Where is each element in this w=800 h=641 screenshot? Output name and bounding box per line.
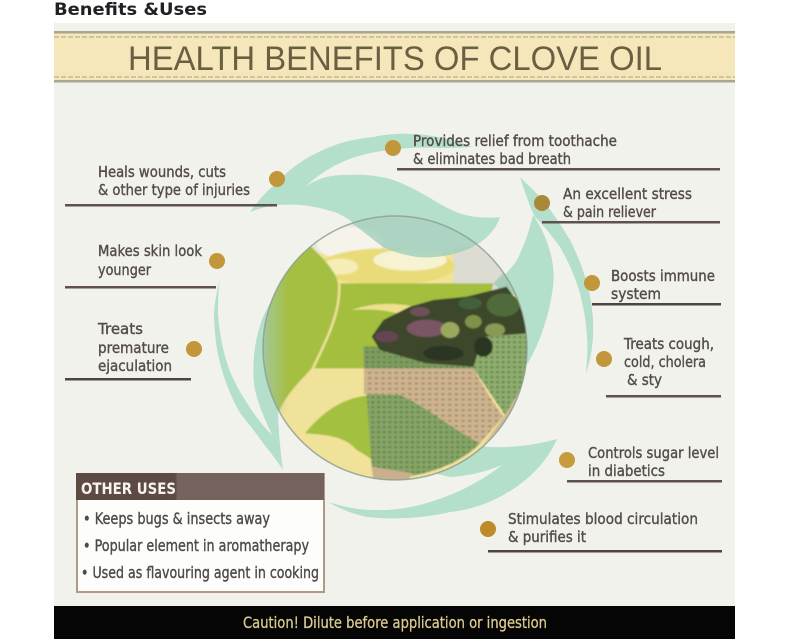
benefit: cough [596, 335, 721, 398]
benefit: cough: Treats cough, [623, 335, 714, 353]
benefit: sugar [559, 444, 722, 482]
benefit: sugar: Controls sugar level [588, 444, 719, 462]
caution text: Caution! Dilute before application or ingestion [243, 613, 547, 632]
benefit: wounds [65, 163, 285, 206]
jar upper background [311, 216, 479, 254]
cloves [372, 287, 527, 367]
sack lower green [367, 394, 480, 478]
other uses list: • Popular element in aromatherapy [83, 536, 309, 555]
benefit: immune [584, 267, 721, 306]
benefit: wounds: & other type of injuries [98, 181, 250, 199]
benefit: wounds: Heals wounds, cuts [98, 163, 226, 181]
benefit: sugar: in diabetics [588, 462, 665, 480]
benefit: toothache: Provides relief from toothache [413, 132, 617, 150]
yellow sliver [352, 303, 412, 314]
photo: clove oil jar and burlap sack in circle [263, 217, 527, 480]
sack right flap [473, 327, 530, 415]
benefit: toothache [385, 132, 720, 170]
leaf: left swirl [214, 280, 300, 470]
benefit: premature ejaculation: premature [98, 339, 169, 357]
benefit: skin [65, 242, 225, 288]
benefit: skin: younger [98, 261, 152, 279]
leaf: bottom swirl [328, 439, 557, 518]
benefit: blood circulation: & purifies it [508, 528, 586, 546]
caution bar [54, 606, 735, 639]
benefit: stress [534, 185, 720, 224]
photo circle outline [263, 216, 527, 480]
panel: other uses [76, 473, 324, 592]
other uses header [76, 473, 324, 500]
jar green centre [314, 283, 493, 368]
jar green left [264, 246, 339, 411]
benefit: immune: Boosts immune [611, 267, 715, 285]
other uses list [81, 509, 319, 582]
benefit: premature ejaculation: Treats [97, 320, 143, 338]
other uses heading: OTHER USES [81, 479, 176, 498]
title text: HEALTH BENEFITS OF CLOVE OIL [128, 40, 662, 78]
benefit: immune: system [611, 285, 661, 303]
benefit: skin: Makes skin look [98, 242, 202, 260]
benefit: premature ejaculation: ejaculation [98, 357, 172, 375]
benefit: stress: An excellent stress [563, 185, 692, 203]
heading: Benefits & Uses: Benefits &Uses [54, 0, 207, 20]
benefit: toothache: & eliminates bad breath [413, 150, 571, 168]
jar lower leaf [305, 395, 372, 460]
leaf: right swirl [470, 177, 593, 400]
other uses list: • Used as flavouring agent in cooking [81, 563, 319, 582]
benefit: cough: & sty [627, 371, 662, 389]
sack tan band [364, 368, 503, 443]
benefit: blood circulation: Stimulates blood circulation [508, 510, 698, 528]
other uses list: • Keeps bugs & insects away [83, 509, 270, 528]
sack upper band [363, 347, 480, 368]
benefit: stress: & pain reliever [563, 203, 657, 221]
benefit: premature ejaculation [65, 320, 202, 380]
leaf: top swirl [250, 134, 500, 257]
benefit: blood circulation [480, 510, 722, 552]
jar lid [318, 248, 455, 285]
panel: infographic background [54, 23, 735, 606]
top leaf overlay on photo [352, 216, 476, 258]
benefit: cough: cold, cholera [624, 353, 706, 371]
title banner [54, 31, 735, 82]
